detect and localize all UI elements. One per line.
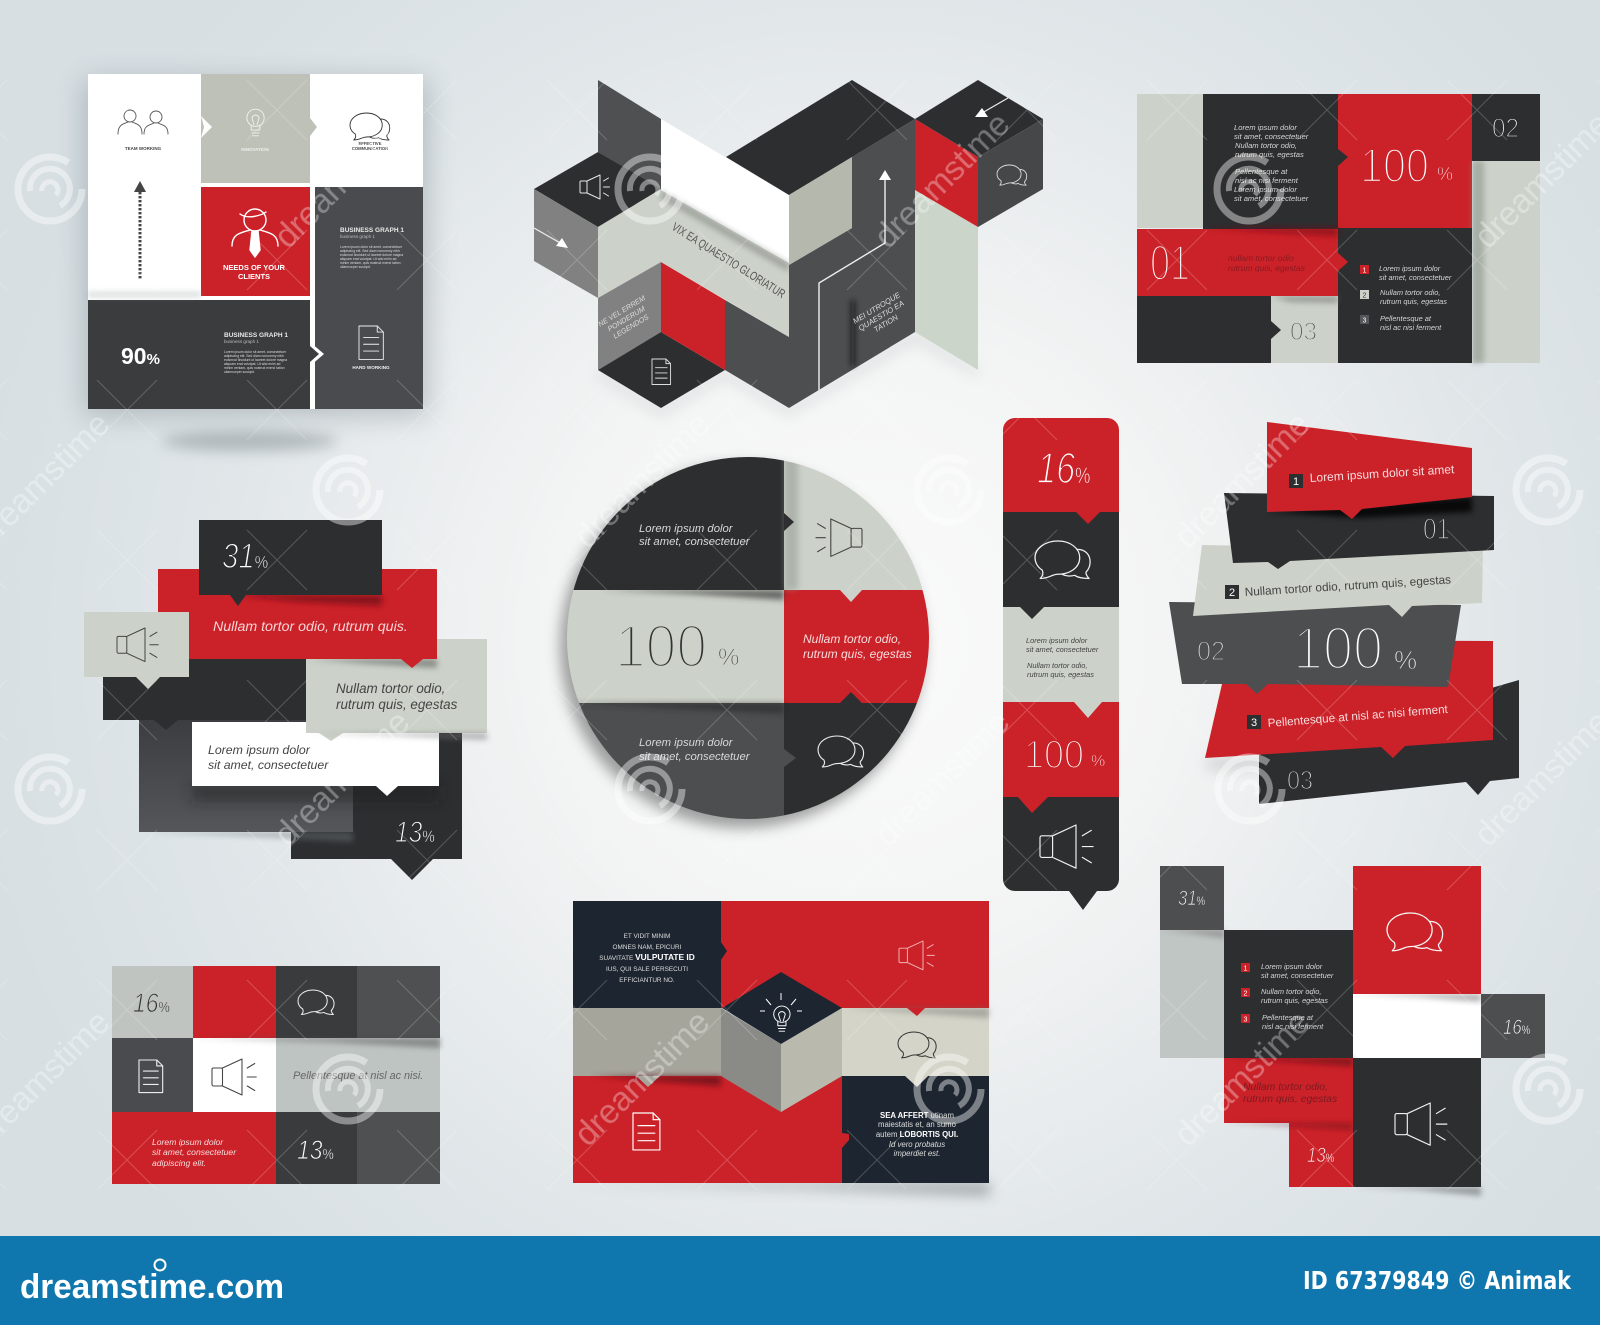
- icon: speaker: [899, 941, 934, 970]
- text: lorem block: Lorem ipsum dolor: [1234, 185, 1297, 194]
- stat: percent sign: %: [1091, 753, 1105, 770]
- icon: team working: [118, 110, 168, 134]
- list: numbered items: 1: [1244, 966, 1248, 972]
- stat: 13 percent: 13%: [1307, 1144, 1335, 1168]
- text: lorem bottom: sit amet, consectetuer: [639, 751, 751, 763]
- item: lorem ipsum: 1: [1293, 476, 1299, 488]
- watermark: crosses spirals and wordmarks: dreamstime: [867, 105, 1017, 256]
- icon: speech bubbles: [818, 736, 864, 767]
- list: numbered items: rutrum quis, egestas: [1261, 996, 1328, 1005]
- text: business graph right: Lorem ipsum dolor sit amet, consectetuer: [340, 245, 403, 249]
- icon: speaker: [117, 628, 158, 662]
- text: business graph bottom: ullamcorper suscipit.: [224, 370, 255, 374]
- icon: speaker: [212, 1059, 256, 1095]
- block: needs of your clients: [201, 187, 310, 296]
- text: business graph bottom: business graph 1: [224, 339, 259, 344]
- stat: 100 percent: 100: [615, 613, 707, 680]
- watermark: crosses spirals and wordmarks: dreamstime: [867, 703, 1017, 854]
- text: nullam tortor pale: rutrum quis, egestas: [336, 697, 458, 712]
- stat: percent sign: %: [718, 644, 739, 671]
- stat: percent sign: %: [1437, 164, 1453, 184]
- block: innovation: [201, 74, 310, 183]
- text: business graph right: minim veniam, quis nostrud exerci tation: [340, 261, 401, 265]
- text: lorem top: Lorem ipsum dolor: [639, 523, 734, 535]
- stat: 31 percent: 31%: [1178, 887, 1206, 911]
- number: 01: 01: [1423, 513, 1450, 546]
- text: lorem top: sit amet, consectetuer: [639, 536, 751, 548]
- text: business graph right: business graph 1: [340, 234, 375, 239]
- item: pellentesque: Pellentesque at nisl ac nisi ferment: [1267, 703, 1449, 730]
- text: step copy: Nullam tortor odio,: [1027, 661, 1087, 670]
- number: 01: 01: [1150, 235, 1190, 291]
- label: effective communication: EFFECTIVE: [358, 141, 382, 146]
- stat: 16 percent: 16%: [1503, 1016, 1531, 1040]
- text: pellentesque: Pellentesque at nisl ac nisi.: [293, 1070, 423, 1082]
- text: sea affert: Id vero probatus: [889, 1140, 945, 1149]
- list: numbered items: [1360, 264, 1452, 332]
- text: mei utroque quaestio ea tation: MEI UTROQUE: [851, 290, 903, 326]
- text: lorem block: Nullam tortor odio,: [1235, 141, 1297, 150]
- number: 03: 03: [1287, 765, 1313, 795]
- stat: percent sign: %: [1394, 645, 1417, 675]
- list: numbered items: Lorem ipsum dolor: [1379, 264, 1441, 273]
- panel: isometric cube diagram: [534, 80, 1043, 415]
- label: team working: TEAM WORKING: [125, 146, 162, 151]
- text: business graph right: BUSINESS GRAPH 1: [340, 227, 404, 234]
- label: effective communication: COMMUNICATION: [352, 146, 388, 151]
- icon: speaker mirrored: [816, 519, 862, 556]
- text: business graph bottom: minim veniam, quis nostrud exerci tation: [224, 366, 285, 370]
- icon: client with tie: [232, 209, 278, 257]
- stat: 31 percent: 31%: [222, 537, 268, 576]
- text: needs of your clients: NEEDS OF YOUR: [223, 263, 285, 272]
- list: numbered items: 3: [1363, 318, 1367, 324]
- icon: speech bubbles: [1387, 913, 1443, 951]
- panel: numbered grid 100 percent: [1137, 94, 1540, 363]
- list: numbered items: rutrum quis, egestas: [1380, 297, 1447, 306]
- logo: dreamstime.com: dreamstime.com: [20, 1268, 284, 1306]
- panel: square dashboard with business graph: [84, 74, 428, 451]
- watermark: crosses spirals and wordmarks: dreamstime: [1167, 1003, 1317, 1154]
- text: step copy: Lorem ipsum dolor: [1026, 636, 1088, 645]
- text: lorem block: rutrum quis, egestas: [1235, 150, 1304, 159]
- panel: vertical steps bar: [1003, 418, 1119, 910]
- watermark: crosses spirals and wordmarks: dreamstime: [267, 105, 417, 256]
- text: lorem block: Lorem ipsum dolor: [1234, 123, 1297, 132]
- text: lorem bottom: Lorem ipsum dolor: [639, 737, 734, 749]
- item: nullam tortor: 2: [1229, 587, 1235, 599]
- icon: speaker: [1040, 825, 1093, 868]
- text: business graph right: [340, 227, 404, 269]
- text: mei utroque quaestio ea tation: TATION: [872, 312, 900, 334]
- number: 02: 02: [1197, 636, 1225, 666]
- text: vix ea quaestio gloriatur: VIX EA QUAESTIO GLORIATUR: [669, 220, 788, 301]
- watermark: crosses spirals and wordmarks: dreamstime: [567, 1003, 717, 1154]
- text: needs of your clients: CLIENTS: [238, 272, 270, 281]
- stat: 16 percent: 16%: [1037, 444, 1090, 493]
- icon: speech bubbles: [1035, 541, 1090, 578]
- text: lorem block: sit amet, consectetuer: [1234, 194, 1309, 203]
- text: business graph right: aliquam erat volutpat. Ut wisi enim ad: [340, 257, 396, 261]
- icon: document: [359, 326, 383, 359]
- text: nullam tortor: Nullam tortor odio,: [803, 632, 901, 646]
- text: ne vel errem pondarum legendos: PONDERUM: [606, 304, 647, 333]
- text: et vidit minim: SUAVITATE VULPUTATE ID: [599, 952, 695, 962]
- watermark: crosses spirals and wordmarks: dreamstime: [567, 405, 717, 556]
- list: numbered items: sit amet, consectetuer: [1261, 971, 1334, 980]
- text: lorem red: adipiscing elit.: [152, 1158, 206, 1168]
- panel: circular segmented chart: [560, 450, 934, 828]
- text: step copy: sit amet, consectetuer: [1026, 645, 1099, 654]
- list: numbered items: 3: [1244, 1016, 1248, 1024]
- list: numbered items: Lorem ipsum dolor: [1261, 962, 1323, 971]
- stat: 13 percent: 13%: [395, 815, 435, 849]
- text: sea affert: SEA AFFERT utinam: [880, 1111, 954, 1120]
- text: business graph bottom: BUSINESS GRAPH 1: [224, 332, 288, 339]
- text: lorem block: Pellentesque at: [1235, 167, 1288, 176]
- text: nullam tortor: nullam tortor odio: [1228, 253, 1294, 263]
- item: pellentesque: 3: [1251, 717, 1257, 729]
- label: hard working: HARD WORKING: [352, 365, 390, 370]
- stat: 16 percent: 16%: [133, 988, 170, 1018]
- number: 02: 02: [1492, 113, 1519, 143]
- item: lorem ipsum: Lorem ipsum dolor sit amet: [1309, 462, 1455, 485]
- text: et vidit minim: ET VIDIT MINIM: [624, 933, 670, 940]
- list: numbered items: Nullam tortor odio,: [1261, 987, 1321, 996]
- list: numbered items: sit amet, consectetuer: [1379, 273, 1452, 282]
- text: et vidit minim: OMNES NAM, EPICURI: [613, 944, 682, 951]
- stat: 100 percent: 100: [1293, 615, 1383, 682]
- item: nullam tortor: Nullam tortor odio, rutrum quis, egestas: [1244, 572, 1451, 599]
- text: sea affert: imperdiet est.: [894, 1149, 940, 1158]
- icon: speaker: [580, 175, 610, 199]
- icon: speech bubbles: [298, 990, 334, 1014]
- list: numbered items: [1241, 962, 1334, 1031]
- panel: checker grid: [112, 966, 440, 1184]
- text: nullam tortor: rutrum quis, egestas: [1243, 1094, 1337, 1105]
- panel: stepped block layout: [1160, 866, 1545, 1196]
- icon: navy diamond with lightbulb: [722, 972, 842, 1044]
- text: ne vel errem pondarum legendos: LEGENDOS: [611, 312, 650, 341]
- text: nullam tortor: Nullam tortor odio,: [1243, 1082, 1328, 1093]
- number: 03: 03: [1290, 318, 1317, 346]
- list: numbered items: Pellentesque at: [1262, 1013, 1314, 1022]
- icon: speech bubbles: [997, 165, 1027, 185]
- block: dark bottom band: [88, 300, 310, 409]
- icon: document: [652, 359, 671, 385]
- list: numbered items: 1: [1363, 268, 1367, 274]
- label: innovation: INNOVATION: [241, 147, 269, 152]
- text: lorem block: sit amet, consectetuer: [1234, 132, 1309, 141]
- icon: speech bubbles: [350, 113, 390, 140]
- icon: lightbulb: [247, 109, 264, 136]
- text: step copy: rutrum quis, egestas: [1027, 670, 1094, 679]
- text: et vidit minim: IUS, QUI SALE PERSECUTI: [606, 966, 688, 973]
- text: nullam tortor pale: Nullam tortor odio,: [336, 681, 445, 696]
- watermark: crosses spirals and wordmarks: dreamstime: [1167, 405, 1317, 556]
- arrow: left cube: [534, 228, 568, 248]
- text: business graph bottom: [224, 332, 288, 374]
- text: nullam tortor red: Nullam tortor odio, rutrum quis.: [213, 619, 408, 635]
- text: et vidit minim: EFFICIANTUR NO.: [619, 977, 675, 984]
- footer bar: [0, 1236, 1600, 1325]
- text: business graph right: euismod tincidunt ut laoreet dolore magna: [340, 253, 403, 257]
- list: numbered items: Pellentesque at: [1380, 314, 1432, 323]
- text: lorem white: Lorem ipsum dolor: [208, 743, 311, 757]
- text: business graph bottom: euismod tincidunt ut laoreet dolore magna: [224, 358, 287, 362]
- text: lorem red: Lorem ipsum dolor: [152, 1137, 224, 1147]
- text: lorem block: nisl ac nisi ferment: [1235, 176, 1299, 185]
- icon: speech bubbles: [898, 1032, 936, 1058]
- text: sea affert: autem LOBORTIS QUI.: [876, 1130, 958, 1139]
- panel: slanted ribbons: [1169, 422, 1519, 804]
- icon: speaker: [1395, 1103, 1447, 1145]
- stat: 100 percent: 100: [1360, 140, 1429, 193]
- text: 90 percent: 90%: [121, 343, 160, 369]
- text: business graph bottom: aliquam erat volutpat. Ut wisi enim ad: [224, 362, 280, 366]
- text: sea affert: maiestatis et, an sumo: [878, 1120, 957, 1129]
- list: numbered items: nisl ac nisi ferment: [1262, 1022, 1324, 1031]
- list: numbered items: 2: [1244, 990, 1248, 998]
- stat: 100 percent: 100: [1024, 733, 1084, 777]
- text: business graph bottom: Lorem ipsum dolor sit amet, consectetuer: [224, 350, 287, 354]
- icon: document: [139, 1060, 163, 1093]
- panel: folded cube banner: [573, 901, 990, 1195]
- text: mei utroque quaestio ea tation: QUAESTIO EA: [857, 299, 906, 333]
- text: business graph right: adipiscing elit. Sed diam nonummy nibh: [340, 249, 400, 253]
- text: business graph bottom: adipiscing elit. Sed diam nonummy nibh: [224, 354, 284, 358]
- text: lorem white: sit amet, consectetuer: [208, 758, 329, 772]
- arrow: long rising: [819, 170, 891, 390]
- block: dark right column: [315, 187, 423, 409]
- text: lorem red: sit amet, consectetuer: [152, 1147, 237, 1157]
- icon: document: [633, 1113, 660, 1150]
- panel: stacked speech tags: [84, 520, 487, 880]
- text: business graph right: ullamcorper suscipit.: [340, 265, 371, 269]
- text: nullam tortor: rutrum quis, egestas: [1228, 263, 1306, 273]
- arrow: right cube: [975, 98, 1008, 117]
- text: nullam tortor: rutrum quis, egestas: [803, 647, 912, 661]
- stat: 13 percent: 13%: [297, 1135, 334, 1165]
- watermark: crosses spirals and wordmarks: dreamstime: [267, 703, 417, 854]
- list: numbered items: Nullam tortor odio,: [1380, 288, 1440, 297]
- list: numbered items: nisl ac nisi ferment: [1380, 323, 1442, 332]
- list: numbered items: 2: [1363, 292, 1367, 300]
- arrow: dotted upward: [134, 181, 146, 280]
- text: ne vel errem pondarum legendos: NE VEL ERREM: [596, 293, 647, 329]
